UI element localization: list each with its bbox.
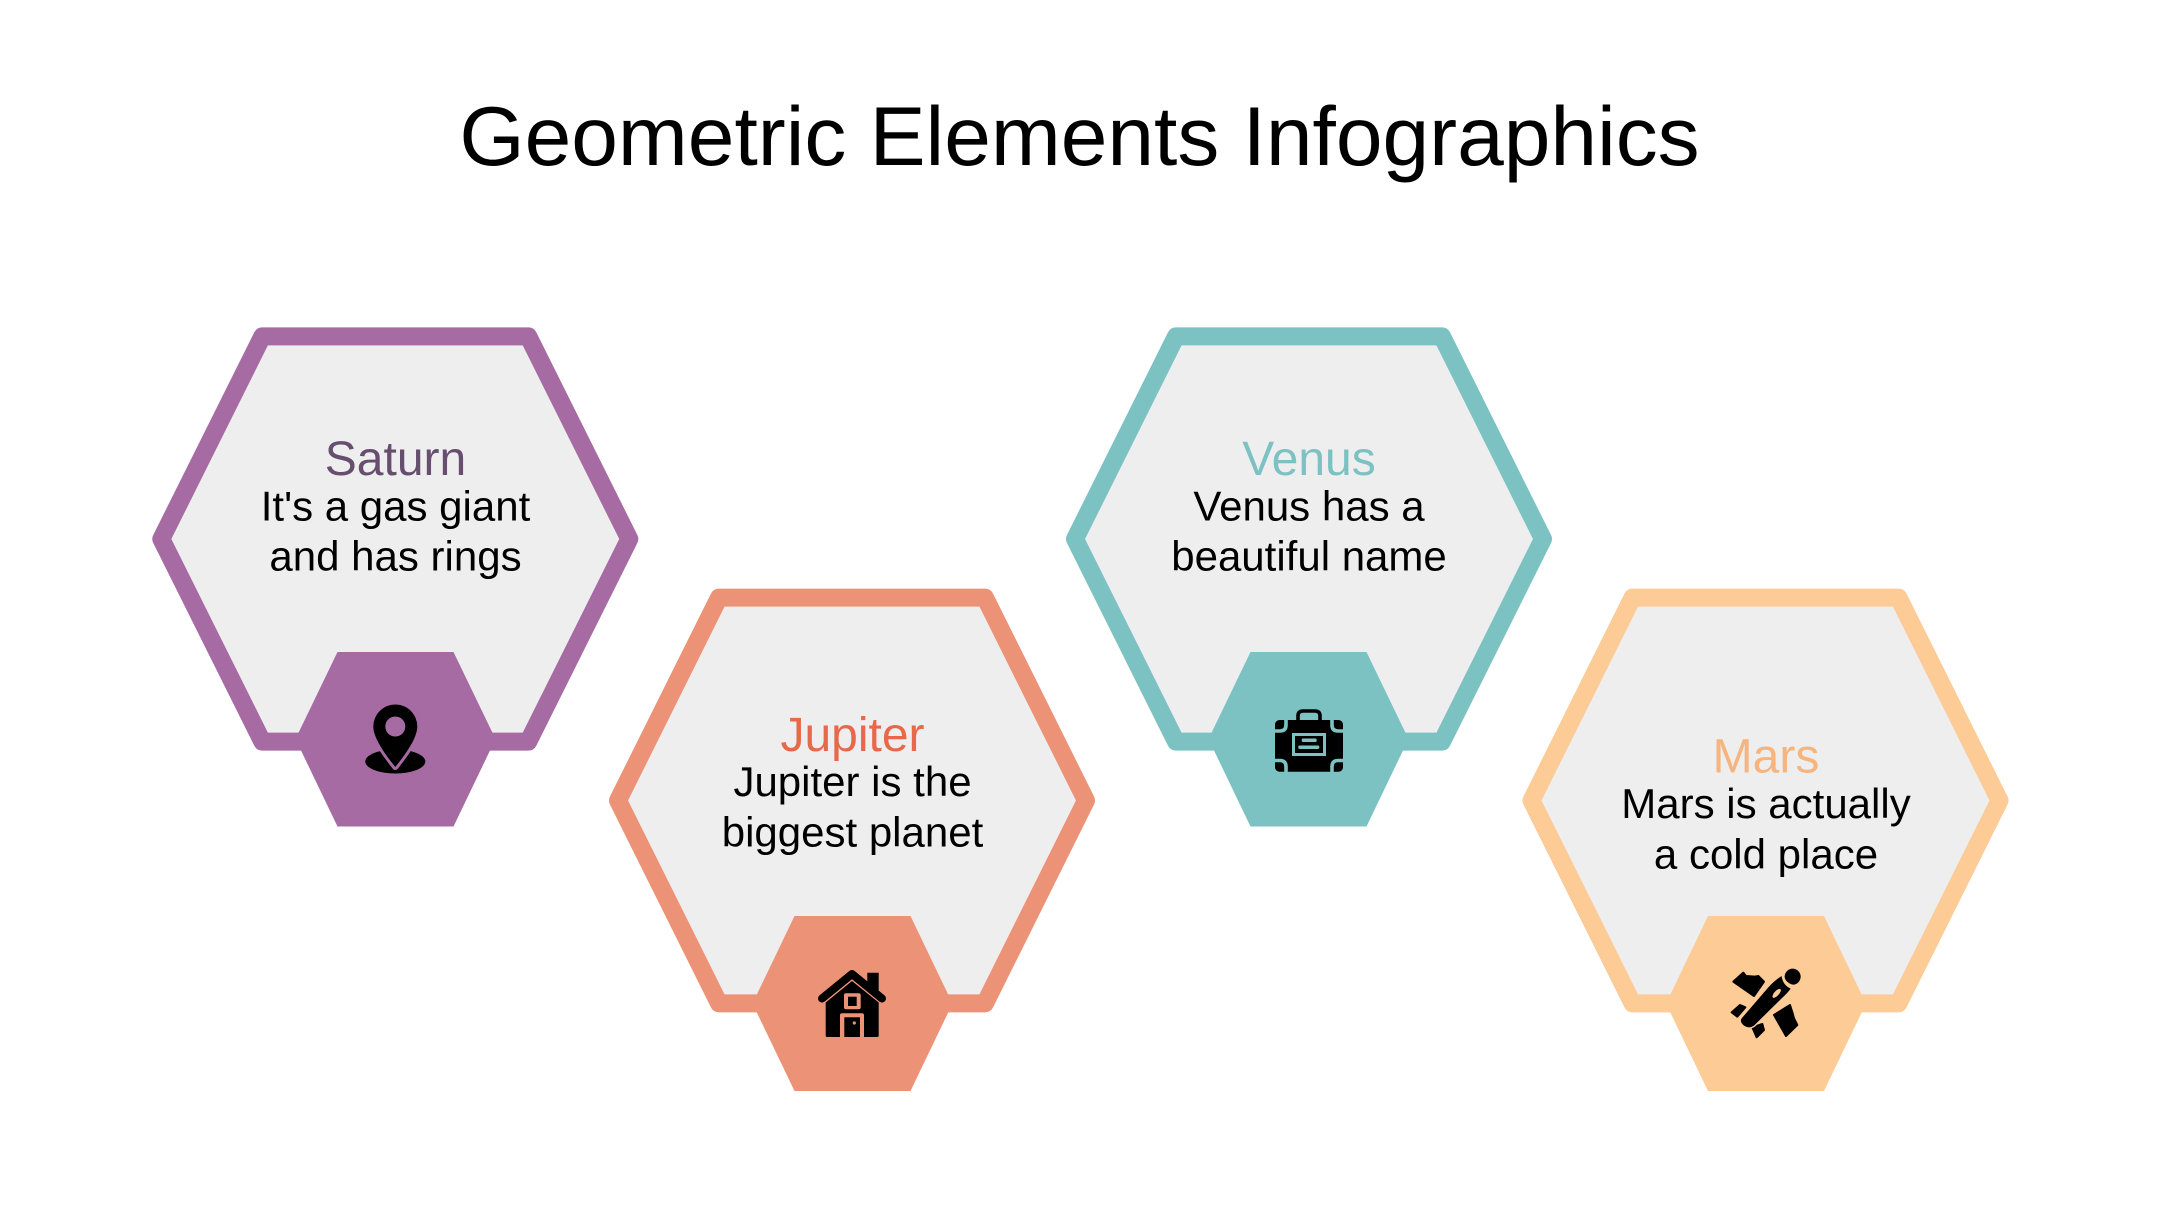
icon: suitcase xyxy=(1274,711,1344,773)
text block: Venus description: Venus has a xyxy=(1193,482,1425,530)
heading: Venus: Venus xyxy=(1242,433,1376,486)
hexagon frame: Jupiter xyxy=(618,598,1086,1003)
heading: Mars: Mars xyxy=(1713,730,1819,784)
panel: Mars xyxy=(1532,598,2000,1091)
heading: Jupiter: Jupiter xyxy=(780,709,925,762)
text block: Mars description: a cold place xyxy=(1654,830,1878,878)
text block: Mars description: Mars is actually xyxy=(1621,780,1911,827)
panel: Saturn xyxy=(161,336,629,826)
text block: Jupiter description: biggest planet xyxy=(722,808,984,856)
icon: airplane xyxy=(1732,969,1801,1037)
title: Geometric Elements Infographics xyxy=(459,89,1700,183)
text block: Saturn description: It's a gas giant xyxy=(261,482,531,530)
panel: Venus xyxy=(1075,336,1543,826)
small hexagon: Jupiter xyxy=(752,916,952,1091)
hexagon frame: Venus xyxy=(1075,336,1543,742)
heading: Saturn: Saturn xyxy=(325,433,466,486)
hexagon frame: Saturn xyxy=(161,336,629,742)
hexagon frame: Mars xyxy=(1532,598,2000,1003)
text block: Saturn description: and has rings xyxy=(269,532,522,580)
panel: Jupiter xyxy=(618,598,1086,1091)
text block: Jupiter description: Jupiter is the xyxy=(733,758,972,805)
small hexagon: Venus xyxy=(1208,652,1408,826)
icon: location pin xyxy=(365,704,425,774)
text block: Venus description: beautiful name xyxy=(1171,532,1447,580)
small hexagon: Saturn xyxy=(296,652,496,826)
small hexagon: Mars xyxy=(1666,916,1866,1091)
icon: house xyxy=(822,973,882,1037)
